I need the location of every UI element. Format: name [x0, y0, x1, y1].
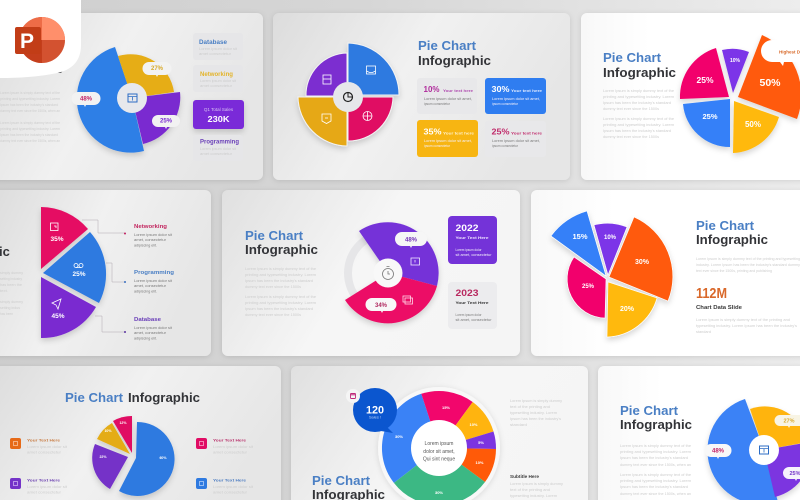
item: orange: Lorem ipsum dolor sit — [27, 445, 67, 449]
donut labels — [395, 405, 484, 495]
donut chart — [345, 222, 439, 323]
box: Networking: Lorem ipsum dolor sit — [200, 79, 236, 83]
pie labels: 15% — [572, 232, 588, 241]
body text: printing and typesetting industry. Lorem — [245, 273, 316, 277]
bubble 25% — [152, 115, 180, 129]
pie chart — [707, 399, 800, 500]
title — [418, 38, 491, 68]
body text: simply dummy — [0, 271, 23, 275]
body text — [620, 444, 691, 496]
body text: Lorem Ipsum is simply dummy text of the printing and — [696, 318, 790, 322]
box: 35%: Your text here — [443, 130, 475, 136]
body text: standard — [510, 423, 527, 427]
body text: Lorem Ipsum is simply dummy text of the — [245, 295, 316, 299]
pie labels: 50% — [745, 120, 761, 129]
pie labels: 22% — [99, 455, 107, 459]
label: Database — [124, 317, 172, 340]
title: Pie Chart — [418, 38, 477, 53]
item: purple: amet consectetur — [27, 490, 62, 494]
box: 2023: 2023 — [456, 288, 478, 298]
body text: dummy text ever since the 1500s, when an — [0, 139, 60, 143]
box: 10%: 10% — [424, 85, 440, 94]
box: 2023: sit amet, consectetur — [456, 318, 492, 322]
box: Q1 Total Sales: 230K — [208, 115, 230, 124]
box: 10%: Lorem ipsum dolor sit amet, — [424, 97, 472, 101]
pie labels — [572, 232, 650, 313]
item: purple: Lorem ipsum dolor sit — [27, 485, 67, 489]
label: Database: amet, consectetur — [134, 331, 167, 335]
box: 35%: ipsum consectetur — [424, 144, 451, 148]
pie chart — [92, 416, 175, 496]
body text: dummy text ever since the 1500s — [245, 313, 301, 317]
bubble 48%: 48% — [405, 238, 418, 244]
item: orange — [10, 438, 67, 454]
label: Networking: adipiscing elit. — [134, 244, 157, 248]
item: orange: Your Text Here — [27, 438, 61, 442]
item: orange: amet consectetur — [27, 450, 62, 454]
box: Networking: Networking — [200, 72, 233, 78]
item: pink: Your Text Here — [213, 438, 247, 442]
callout: 120 sales — [353, 388, 397, 433]
item: pink: amet consectetur — [213, 450, 248, 454]
box: Programming — [193, 135, 243, 161]
title: Infographic — [603, 65, 676, 80]
box: 2022: 2022 — [456, 223, 478, 233]
pie labels — [696, 58, 781, 129]
panel: mid-right exploded pie slide — [531, 190, 800, 356]
icon: calendar — [346, 389, 360, 403]
body text — [0, 91, 60, 143]
label: Database: Lorem ipsum dolor sit — [134, 326, 172, 330]
body text: dummy text ever since the 1500s — [603, 135, 659, 139]
donut labels: 30% — [395, 434, 403, 439]
label: Programming: Programming — [134, 270, 174, 276]
item: blue: Lorem ipsum dolor sit — [213, 485, 253, 489]
icon: globe — [363, 112, 372, 120]
item: blue — [196, 478, 253, 494]
body text: Ipsum has been the industry's standard — [0, 103, 58, 107]
body text: Ipsum has been the industry's standard — [245, 307, 313, 311]
pie chart — [298, 43, 399, 146]
label: Programming — [124, 270, 174, 294]
body text: dummy text ever since the 1500s, when an — [620, 492, 691, 496]
bubble 48% — [705, 444, 732, 459]
box: 2022: sit amet, consectetur — [456, 253, 492, 257]
label: Networking — [124, 224, 172, 248]
exploded pie chart — [680, 35, 800, 153]
pie chart — [77, 47, 180, 153]
body text — [696, 257, 800, 273]
icon: alert message — [411, 258, 420, 265]
box: 10%: Your text here — [443, 88, 474, 93]
label: Networking: Lorem ipsum dolor sit — [134, 233, 172, 237]
center text — [423, 441, 455, 462]
pie labels: 25% — [582, 284, 595, 290]
bubble 34% — [366, 298, 397, 313]
body text — [245, 267, 316, 317]
label: Database: Database — [134, 317, 162, 323]
title: Pie Chart — [603, 50, 662, 65]
body text: Lorem Ipsum is simply dummy text of the — [0, 91, 60, 95]
box: 30%: Your text here — [511, 88, 543, 93]
panel: bottom-centre donut slide — [291, 366, 588, 500]
box: 25%: Lorem ipsum dolor sit amet, — [492, 139, 540, 143]
body text: Lorem Ipsum is simply dummy text of the — [603, 117, 674, 121]
body text: Lorem Ipsum is simply dummy text of the — [620, 444, 691, 448]
panel: top-left pie slide — [0, 13, 263, 180]
pie labels: 12% — [119, 421, 127, 425]
bubble 25%: 25% — [160, 118, 173, 124]
title — [65, 390, 200, 405]
panel: mid-left half-pie slide — [0, 190, 211, 356]
body text: printing and typesetting industry. Lorem — [245, 301, 316, 305]
body text: Ipsum has been the industry's standard — [603, 129, 671, 133]
body text: setting industry — [0, 277, 22, 281]
box: Q1 Total Sales — [193, 100, 244, 129]
center text: Qui sint neque — [423, 456, 455, 462]
panel: bottom-right pie slide — [598, 366, 800, 500]
box: 2022: Your Text Here — [456, 235, 489, 240]
title: Infographic — [245, 242, 318, 257]
pie labels: 10% — [730, 58, 741, 64]
box: Programming: Programming — [200, 140, 239, 146]
box: 25%: 25% — [492, 128, 510, 136]
donut labels: 15% — [442, 405, 450, 410]
body text: Lorem Ipsum is simply dummy text of the — [620, 473, 691, 477]
body text — [0, 271, 23, 316]
label: Networking: Networking — [134, 224, 167, 230]
donut labels: 10% — [475, 460, 484, 465]
icon: inbox — [366, 66, 376, 74]
body text: typesetting industry. Lorem — [510, 494, 557, 498]
box: 2023 — [448, 282, 497, 329]
title — [696, 218, 768, 247]
body text: standard — [696, 330, 711, 334]
item: purple: Your Text Here — [27, 478, 61, 482]
body text — [696, 318, 797, 334]
body text: printing and typesetting industry. Lorem — [603, 95, 674, 99]
center text: Lorem ipsum — [425, 441, 453, 447]
pie labels: 30% — [635, 259, 650, 266]
body text: Lorem Ipsum is simply dummy — [510, 482, 563, 486]
panel: bottom-left pie slide — [0, 366, 281, 500]
body text: Ipsum has been the industry's standard — [245, 279, 313, 283]
item: pink — [196, 438, 253, 454]
box: Q1 Total Sales: Q1 Total Sales — [204, 107, 234, 112]
bubble 25% — [783, 467, 800, 481]
box: Database: amet consectetur — [199, 52, 232, 56]
pie labels: 10% — [104, 429, 112, 433]
connector lines — [82, 220, 125, 332]
pie labels: 60% — [159, 456, 167, 460]
body text: text of the printing and — [510, 405, 550, 409]
donut labels: 10% — [469, 422, 478, 427]
box: 30% — [485, 78, 546, 114]
box: 30%: ipsum consectetur — [492, 102, 519, 106]
pie labels: 25% — [702, 112, 718, 121]
panel: mid-left half-pie slide: 45% — [51, 313, 65, 320]
body text: has been — [0, 312, 13, 316]
bubble 27%: 27% — [783, 418, 795, 424]
box: 25% — [485, 121, 546, 157]
body text: has been the — [0, 283, 22, 287]
icon: stopwatch — [382, 266, 394, 280]
box: Networking: amet consectetur — [200, 84, 233, 88]
box: Programming: amet consectetur — [200, 152, 233, 156]
icon: PowerPoint: P — [20, 30, 34, 53]
body text: industry. Lorem Ipsum has been the industry's standard dummy — [696, 263, 800, 267]
bubble 27%: 27% — [151, 66, 164, 72]
box: Database: Lorem ipsum dolor sit — [199, 47, 237, 51]
center icon — [117, 83, 147, 113]
bubble 48% — [395, 232, 427, 248]
pie labels — [99, 421, 167, 460]
subtitle: Subtitle Here — [510, 474, 540, 479]
box: 35%: Lorem ipsum dolor sit amet, — [424, 139, 472, 143]
callout: 120 sales: Sales ! — [369, 414, 381, 420]
body text: dummy text ever since the 1500s, when an — [620, 463, 691, 467]
body text: text of the printing and — [510, 488, 550, 492]
box: 10%: ipsum consectetur — [424, 102, 451, 106]
body text: Lorem Ipsum is simply dummy text of the — [245, 267, 316, 271]
body text: Lorem Ipsum is simply dummy text of the printing and typesetting — [696, 257, 800, 261]
panel: top-centre four-part pie slide — [273, 13, 570, 180]
body text: Ipsum has been the industry's standard — [620, 456, 688, 460]
box: Networking — [193, 65, 243, 92]
donut chart — [378, 387, 500, 500]
panel: top-right exploded pie slide — [581, 13, 800, 180]
pie labels: 20% — [620, 306, 635, 313]
bubble 27% — [775, 415, 800, 428]
label: Networking: amet, consectetur — [134, 238, 167, 242]
donut labels: 5% — [478, 440, 484, 445]
pie labels: 50% — [759, 77, 781, 89]
icon: chat — [403, 296, 412, 304]
pie labels: 25% — [696, 75, 714, 85]
body text: printing and typesetting industry. Lorem — [620, 450, 691, 454]
body text: Ipsum has been the industry's standard — [603, 101, 671, 105]
box: 10% — [417, 78, 477, 114]
bubble 48% — [72, 92, 101, 107]
body text — [603, 89, 674, 139]
box: 2023: Your Text Here — [456, 300, 489, 305]
body text — [510, 482, 563, 498]
title: Pie Chart — [620, 403, 679, 418]
panel: mid-left half-pie slide: 35% — [50, 236, 64, 243]
body text: typesetting industry. Lorem Ipsum has been the industry's — [696, 324, 797, 328]
box: 35% — [417, 120, 478, 157]
body text — [510, 399, 562, 427]
body text: setting indus — [0, 306, 20, 310]
body text: Lorem Ipsum is simply dummy — [510, 399, 562, 403]
body text: Ipsum has been the industry's standard — [0, 133, 58, 137]
body text: text ever since the 1500s, printing and publishing — [696, 269, 772, 273]
label: Programming: amet, consectetur — [134, 284, 167, 288]
title: Infographic — [696, 232, 768, 247]
title — [245, 228, 318, 257]
body text: dummy text ever since the 1500s, when an — [0, 109, 60, 113]
callout: 120 sales: 120 — [366, 404, 384, 416]
badge: PowerPoint logo tab — [0, 0, 81, 78]
box: 2023: Lorem ipsum dolor — [456, 313, 482, 317]
body text: text. — [0, 289, 8, 293]
bubble 27% — [143, 62, 172, 77]
center text: dolor sit amet, — [423, 449, 455, 455]
label: Database: adipiscing elit. — [134, 336, 157, 340]
title — [312, 473, 385, 500]
box: 35%: 35% — [424, 128, 442, 136]
title: Infographic — [128, 390, 200, 405]
box: 25%: ipsum consectetur — [492, 144, 519, 148]
item: purple — [10, 478, 67, 494]
center icon — [333, 82, 363, 112]
center icon — [749, 435, 779, 465]
title: Pie Chart — [245, 228, 304, 243]
title: Infographic — [418, 53, 491, 68]
label: Programming: Lorem ipsum dolor sit — [134, 279, 172, 283]
body text: Ipsum has been the industry's standard — [620, 485, 688, 489]
title: Pie Chart — [696, 218, 755, 233]
icon: save — [323, 75, 331, 84]
body text: dummy text ever since the 1500s — [245, 285, 301, 289]
body text: dummy text ever since the 1500s — [603, 107, 659, 111]
pie labels: 10% — [604, 235, 617, 241]
title — [620, 403, 692, 432]
bubble 48%: 48% — [712, 448, 725, 454]
body text: Lorem Ipsum is simply dummy text of the — [603, 89, 674, 93]
stat: 112M: 112M — [696, 285, 727, 302]
label: Programming: adipiscing elit. — [134, 290, 157, 294]
title — [603, 50, 676, 80]
title: Pie Chart — [65, 390, 124, 405]
subtitle: Chart Data Slide — [696, 305, 742, 311]
box: Database: Database — [199, 40, 228, 46]
box: 25%: Your text here — [511, 130, 543, 136]
item: blue: Your Text Here — [213, 478, 247, 482]
body text: simply dummy — [0, 300, 23, 304]
box: Programming: Lorem ipsum dolor sit — [200, 147, 236, 151]
callout: highest data — [761, 40, 800, 66]
box: 30%: Lorem ipsum dolor sit amet, — [492, 97, 540, 101]
box: 2022: Lorem ipsum dolor — [456, 248, 482, 252]
box: Database — [193, 33, 243, 60]
bubble 48%: 48% — [80, 96, 93, 102]
item: pink: Lorem ipsum dolor sit — [213, 445, 253, 449]
bubble 34%: 34% — [375, 303, 388, 309]
segment icons and values — [50, 223, 83, 309]
item: blue: amet consectetur — [213, 490, 248, 494]
body text: printing and typesetting industry. Lorem — [0, 127, 60, 131]
body text: typesetting industry. Lorem — [510, 411, 557, 415]
panel: mid-left half-pie slide: 25% — [72, 271, 86, 278]
title: Pie Chart — [312, 473, 371, 488]
box: 30%: 30% — [492, 85, 510, 94]
box: 2022 — [448, 216, 497, 264]
panel: mid-centre donut slide — [222, 190, 520, 356]
half pie chart — [41, 207, 106, 338]
icon: shield — [322, 114, 331, 124]
body text: printing and typesetting industry. Lorem — [620, 479, 691, 483]
title: Infographic — [620, 417, 692, 432]
donut labels: 30% — [435, 490, 443, 495]
exploded pie chart — [551, 211, 673, 337]
body text: printing and typesetting industry. Lorem — [0, 97, 60, 101]
body text: Lorem Ipsum is simply dummy text of the — [0, 121, 60, 125]
body text: printing and typesetting industry. Lorem — [603, 123, 674, 127]
body text: Ipsum has been the industry's — [510, 417, 561, 421]
